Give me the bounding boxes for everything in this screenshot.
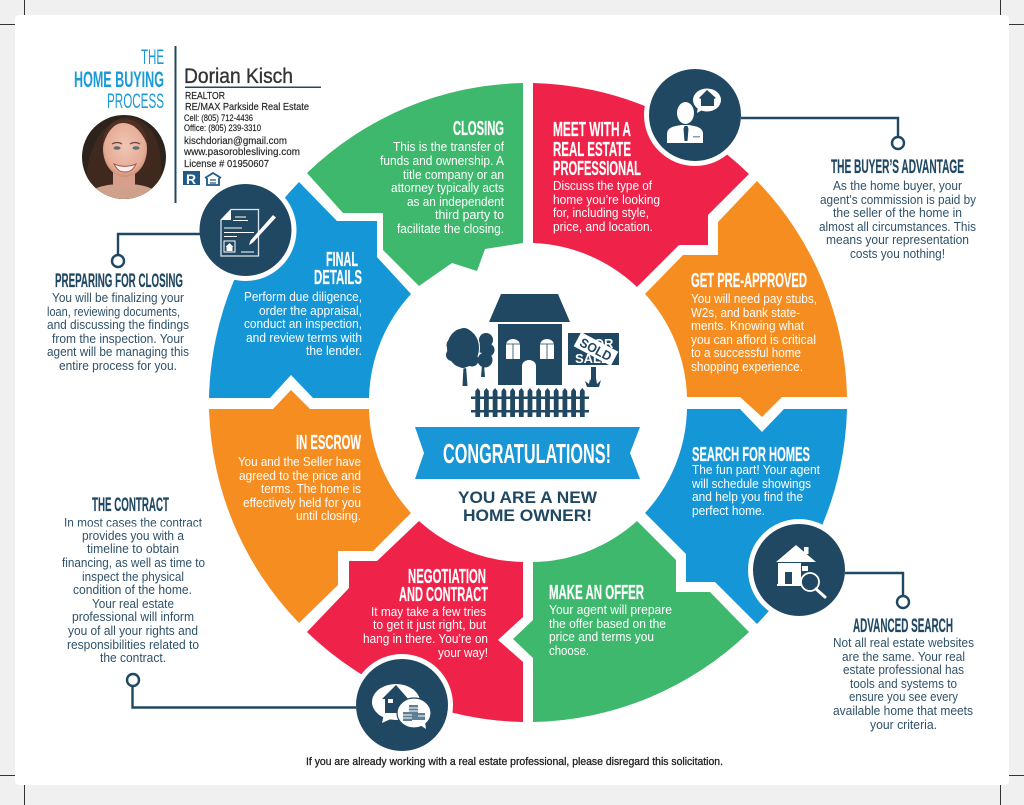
text: the contract: financing, as well as time to bbox=[62, 555, 205, 570]
icon: realtor logo bbox=[183, 171, 200, 187]
text: the contract bbox=[62, 495, 205, 665]
segment: make an offer: Your agent will prepare bbox=[549, 602, 672, 617]
text: the contract: the contract. bbox=[100, 650, 166, 665]
text: advanced search: ensure you see every bbox=[849, 689, 959, 704]
text: the buyer's advantage: agent's commission is paid by bbox=[820, 192, 977, 207]
connector: advanced search bbox=[845, 573, 909, 608]
text: preparing for closing: from the inspection. Your bbox=[52, 331, 185, 346]
connector: the contract bbox=[127, 674, 356, 708]
segment: get pre-approved bbox=[645, 181, 847, 417]
segment: search for homes: will schedule showings bbox=[691, 476, 811, 491]
text: the contract: responsibilities related to bbox=[67, 637, 199, 652]
segment: negotiation and contract bbox=[307, 521, 523, 722]
icon: agent with house thought bubble bbox=[644, 64, 746, 166]
segment: make an offer: MAKE AN OFFER bbox=[549, 582, 644, 604]
icon: chat with house and coins bbox=[351, 654, 453, 756]
agent contact block: www.pasoroblesliving.com bbox=[183, 146, 300, 158]
segment: final details: the lender. bbox=[306, 343, 362, 358]
segment: in escrow: You and the Seller have bbox=[238, 454, 361, 469]
agent contact block: RE/MAX Parkside Real Estate bbox=[185, 101, 309, 113]
segment: get pre-approved: You will need pay stubs, bbox=[691, 291, 817, 306]
segment: closing: as an independent bbox=[407, 194, 504, 209]
segment: in escrow: terms. The home is bbox=[261, 481, 361, 496]
segment: get pre-approved: W2s, and bank state- bbox=[691, 305, 800, 320]
agent photo bbox=[82, 115, 166, 199]
segment: meet with a real estate professional bbox=[533, 83, 749, 287]
segment: search for homes: The fun part! Your agent bbox=[692, 462, 820, 477]
text: preparing for closing bbox=[47, 271, 189, 373]
text: you are a new home owner: HOME OWNER! bbox=[463, 506, 592, 525]
segment: closing bbox=[307, 83, 523, 286]
text: advanced search: tools and systems to bbox=[850, 676, 957, 691]
segment: search for homes bbox=[645, 409, 847, 624]
text: advanced search bbox=[833, 616, 974, 732]
text: the buyer's advantage: As the home buyer, your bbox=[833, 178, 963, 193]
illustration: sold sign: SALE bbox=[575, 351, 610, 366]
text: the contract: inspect the physical bbox=[82, 569, 184, 584]
segment: meet with a real estate professional: price, and location. bbox=[553, 219, 653, 234]
text: the contract: timeline to obtain bbox=[87, 541, 179, 556]
segment: make an offer: choose. bbox=[549, 643, 589, 658]
text: preparing for closing: You will be finalizing your bbox=[52, 290, 185, 305]
segment: meet with a real estate professional: REAL ESTATE bbox=[553, 139, 631, 161]
text: advanced search: available home that meets bbox=[833, 703, 973, 718]
segment: get pre-approved: ments. Knowing what bbox=[691, 318, 804, 333]
illustration: trees bbox=[446, 328, 494, 386]
segment: final details: order the appraisal, bbox=[259, 303, 362, 318]
segment: negotiation and contract: It may take a few tries bbox=[371, 604, 486, 619]
illustration: house bbox=[489, 294, 570, 385]
segment: final details: and review terms with bbox=[246, 330, 362, 345]
segment: get pre-approved: GET PRE-APPROVED bbox=[691, 270, 807, 292]
segment: in escrow: agreed to the price and bbox=[239, 468, 361, 483]
text: the buyer's advantage bbox=[819, 157, 977, 261]
text: the contract: you of all your rights and bbox=[68, 623, 198, 638]
segment: negotiation and contract: hang in there. You’re on bbox=[363, 631, 488, 646]
segment: closing: third party to bbox=[435, 207, 504, 222]
segment: final details: DETAILS bbox=[314, 267, 362, 289]
segment: meet with a real estate professional: for, including style, bbox=[553, 205, 649, 220]
segment: meet with a real estate professional: MEET WITH A bbox=[553, 119, 631, 141]
text: the contract: THE CONTRACT bbox=[92, 495, 169, 516]
text: advanced search: your criteria. bbox=[870, 717, 937, 732]
text: the contract: professional will inform bbox=[72, 609, 194, 624]
agent contact block: Office: (805) 239-3310 bbox=[184, 123, 261, 133]
segment: negotiation and contract: NEGOTIATION bbox=[408, 566, 486, 588]
text: advanced search: Not all real estate websites bbox=[833, 635, 974, 650]
segment: final details: FINAL bbox=[326, 249, 358, 271]
agent contact block: Dorian Kisch bbox=[184, 65, 293, 88]
illustration: picket fence bbox=[471, 388, 589, 417]
connector: preparing for closing bbox=[112, 234, 200, 267]
text: preparing for closing: and discussing the findings bbox=[47, 317, 189, 332]
segment: in escrow bbox=[209, 390, 411, 623]
segment: negotiation and contract: AND CONTRACT bbox=[399, 584, 488, 606]
segment: closing: title company or an bbox=[403, 167, 504, 182]
icon: house with magnifier bbox=[748, 519, 850, 621]
icon: equal housing logo bbox=[205, 173, 221, 185]
icon: realtor logo: R bbox=[186, 171, 196, 187]
segment: final details: conduct an inspection, bbox=[244, 316, 362, 331]
text: preparing for closing: PREPARING FOR CLOSING bbox=[55, 271, 183, 292]
agent contact block bbox=[183, 65, 321, 170]
agent contact block: License # 01950607 bbox=[184, 158, 269, 170]
segment: negotiation and contract: your way! bbox=[438, 645, 488, 660]
title: the home buying process: PROCESS bbox=[107, 90, 164, 113]
text: the buyer's advantage: means your representation bbox=[826, 232, 969, 247]
segment: in escrow: effectively held for you bbox=[243, 495, 361, 510]
segment: search for homes: perfect home. bbox=[692, 503, 765, 518]
segment: negotiation and contract: to get it just right, but bbox=[373, 617, 486, 632]
segment: search for homes: SEARCH FOR HOMES bbox=[692, 444, 810, 466]
segment: get pre-approved: to a successful home bbox=[691, 345, 801, 360]
text: the buyer's advantage: the seller of the home in bbox=[833, 205, 962, 220]
illustration: sold sign bbox=[568, 332, 619, 387]
banner: congratulations: CONGRATULATIONS! bbox=[443, 438, 611, 469]
connector: buyer's advantage bbox=[741, 118, 904, 149]
agent contact block: kischdorian@gmail.com bbox=[184, 135, 287, 147]
illustration: sold sign: SOLD bbox=[577, 335, 614, 364]
segment: final details bbox=[209, 182, 411, 398]
segment: get pre-approved: you can afford is critical bbox=[691, 332, 816, 347]
title: the home buying process: HOME BUYING bbox=[74, 67, 164, 92]
agent contact block: Cell: (805) 712-4436 bbox=[184, 113, 253, 123]
segment: meet with a real estate professional: home you’re looking bbox=[553, 192, 660, 207]
text: preparing for closing: loan, reviewing documents, bbox=[47, 304, 180, 319]
title: the home buying process: THE bbox=[141, 46, 164, 69]
illustration: sold sign: FOR bbox=[586, 336, 614, 351]
footer disclaimer: If you are already working with a real estate professional, please disregard this solicitation. bbox=[306, 756, 723, 768]
text: the contract: provides you with a bbox=[82, 528, 185, 543]
segment: make an offer: the offer based on the bbox=[549, 616, 666, 631]
text: the buyer's advantage: almost all circumstances. This bbox=[819, 219, 976, 234]
text: the contract: Your real estate bbox=[92, 596, 174, 611]
agent contact block: REALTOR bbox=[185, 90, 225, 102]
text: you are a new home owner: YOU ARE A NEW bbox=[458, 488, 598, 507]
banner: congratulations bbox=[415, 427, 640, 479]
segment: make an offer: price and terms you bbox=[549, 629, 654, 644]
segment: in escrow: until closing. bbox=[296, 508, 361, 523]
segment: meet with a real estate professional: PROFESSIONAL bbox=[553, 158, 641, 180]
segment: closing: CLOSING bbox=[453, 118, 504, 140]
text: the contract: In most cases the contract bbox=[64, 515, 202, 530]
segment: make an offer bbox=[513, 521, 749, 722]
segment: meet with a real estate professional: Discuss the type of bbox=[553, 178, 652, 193]
text: the buyer's advantage: costs you nothing! bbox=[850, 246, 945, 261]
segment: closing: attorney typically acts bbox=[391, 180, 504, 195]
text: preparing for closing: agent will be managing this bbox=[47, 344, 189, 359]
text: the contract: condition of the home. bbox=[73, 582, 192, 597]
icon: contract and pen bbox=[194, 179, 296, 281]
segment: search for homes: and help you find the bbox=[692, 489, 803, 504]
segment: get pre-approved: shopping experience. bbox=[691, 359, 803, 374]
segment: in escrow: IN ESCROW bbox=[296, 432, 361, 454]
segment: closing: facilitate the closing. bbox=[397, 221, 504, 236]
segment: final details: Perform due diligence, bbox=[244, 289, 362, 304]
title: the home buying process bbox=[74, 46, 164, 113]
segment: closing: This is the transfer of bbox=[393, 139, 504, 154]
text: advanced search: estate professional has bbox=[843, 662, 964, 677]
text: you are a new home owner bbox=[458, 488, 598, 525]
text: preparing for closing: entire process for you. bbox=[59, 358, 177, 373]
text: advanced search: are the same. Your real bbox=[842, 649, 965, 664]
segment: closing: funds and ownership. A bbox=[380, 153, 504, 168]
